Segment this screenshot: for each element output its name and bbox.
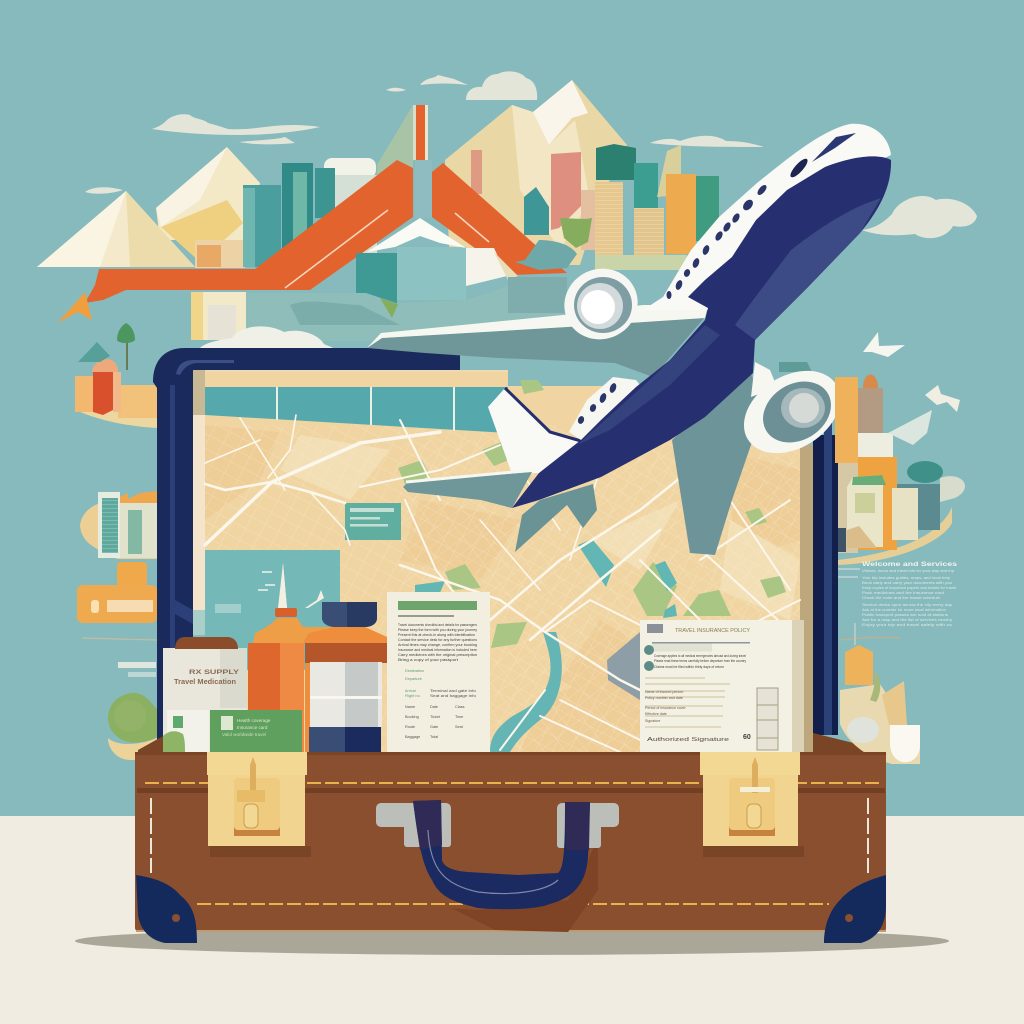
jar: [303, 602, 387, 752]
map green parks: [398, 380, 786, 648]
left corner: [136, 875, 197, 943]
document right: Claims must be filed within thirty days of return: [654, 665, 724, 669]
suitcase lid frame: [153, 348, 838, 752]
document left: Route: [405, 725, 415, 729]
document left: Seat and baggage info: [430, 694, 476, 698]
document left: Seat: [455, 725, 464, 729]
green card: Insurance card: [237, 725, 268, 730]
map sign: [345, 503, 401, 540]
document left: Destination: [405, 669, 424, 673]
document left: Arrival times may change, confirm your booking: [398, 643, 477, 647]
map picture panel: [205, 550, 340, 670]
services body text: Visitors, hours and travel info for your stay and trip: [862, 568, 954, 573]
near engine pylon: [751, 362, 777, 397]
green card: Health coverage: [237, 718, 271, 723]
document right: Effective date: [645, 712, 667, 716]
white medicine box: RX SUPPLY: [189, 670, 239, 676]
document left: Flight no.: [405, 694, 421, 698]
tail plane lower: [515, 484, 597, 552]
right lower vignette: [840, 623, 920, 764]
document left: Ticket: [430, 715, 441, 719]
left clasp: [207, 752, 311, 857]
map: [205, 372, 800, 752]
left town vignette top: [75, 323, 157, 428]
services body text: Enjoy your trip and travel safely with us: [862, 622, 952, 627]
handle shadow: [451, 838, 598, 932]
document left: Time: [455, 715, 463, 719]
right corner: [824, 875, 886, 943]
orange arrow: [57, 105, 567, 323]
teal towers: [243, 105, 413, 267]
document left: Booking: [405, 715, 419, 719]
document left: Gate: [430, 725, 438, 729]
bottle, jar and box group: [163, 563, 387, 752]
services body text: Your trip includes guides, maps, and local help: [862, 575, 950, 580]
right handle mount: [557, 803, 619, 848]
document left: Date: [430, 705, 438, 709]
right towers: [560, 144, 719, 270]
front left mountain: [37, 191, 195, 267]
document left: Contact the service desk for any further questions: [398, 638, 477, 642]
skyline collage: [37, 80, 719, 341]
tail plane upper: [403, 472, 532, 508]
near wing: [672, 370, 763, 555]
plane one: [863, 332, 905, 357]
services body text: Check the route and the transit schedule: [862, 595, 940, 600]
center mountains: [445, 80, 627, 265]
suitcase interior ledges: [138, 733, 882, 753]
right clasp: [700, 752, 804, 857]
map shading: [205, 425, 800, 752]
document right: Coverage applies to all medical emergencies abroad and during travel: [654, 654, 746, 658]
left handle mount: [376, 803, 451, 847]
map river: [490, 632, 562, 752]
handle: [413, 800, 590, 909]
central blocks and valley: [191, 218, 578, 341]
airplane: [403, 124, 891, 555]
stitching: [145, 783, 880, 904]
map teal patches: [415, 539, 677, 618]
document left: Present this at check-in along with identification: [398, 633, 475, 637]
left small bits and bush: [82, 638, 160, 760]
document right: Policy number and date: [645, 696, 683, 700]
services body text: Service desks open across the city every day: [862, 602, 952, 607]
document right: Please read these terms carefully before departure from the country: [654, 659, 746, 663]
document left: Class: [455, 705, 465, 709]
white medicine box: Travel Medication: [174, 679, 236, 686]
map water: [205, 387, 508, 433]
services body text: [862, 568, 956, 627]
services body text: Public transport passes are sold at stations: [862, 612, 948, 617]
document right: Signature: [645, 719, 660, 723]
document right: Authorized Signature: [647, 737, 729, 743]
near engine: [729, 354, 855, 470]
small planes: [863, 332, 960, 412]
passenger windows: [577, 183, 768, 425]
left town vignette middle: [77, 491, 157, 623]
orange bottle: [248, 563, 360, 752]
document right: [640, 620, 804, 752]
document left: Bring a copy of your passport: [398, 658, 458, 662]
ground shadow: [75, 927, 949, 955]
document left: Total: [430, 735, 438, 739]
document left: Please keep the form with you during your journey: [398, 628, 477, 632]
document left: Baggage: [405, 735, 420, 739]
green card: [210, 710, 302, 752]
document left: Name: [405, 705, 415, 709]
back left mountain: [156, 147, 260, 268]
tail fin: [488, 388, 581, 474]
document left: Terminal and gate info: [430, 689, 476, 693]
map roads: [205, 415, 800, 752]
cloud on lid: [200, 326, 333, 348]
document left: Carry medicines with the original prescription: [398, 653, 477, 657]
services text block: [838, 561, 958, 627]
services heading: Welcome and Services: [862, 561, 958, 568]
document left: Travel documents checklist and details for passengers: [398, 623, 477, 627]
document left: [387, 592, 490, 752]
right town vignette: [835, 374, 965, 565]
services body text: Ask at the counter for more local information: [862, 607, 946, 612]
services body text: Book early and carry your documents with you: [862, 580, 952, 585]
map grey area: [607, 632, 640, 700]
clouds: [85, 71, 977, 238]
services body text: Ask for a map and the list of services nearby: [862, 617, 952, 622]
white medicine box: [163, 637, 247, 752]
suitcase base: [135, 752, 886, 943]
document right: TRAVEL INSURANCE POLICY: [675, 628, 751, 634]
far wing and engine: [367, 257, 708, 377]
document right: Name of insured person: [645, 690, 683, 694]
document left: Departure: [405, 677, 422, 681]
fuselage highlight: [735, 198, 881, 340]
services body text: Keep copies of important papers and tickets for travel: [862, 585, 956, 590]
lower fuselage white strip: [569, 377, 640, 440]
document right: Period of insurance cover: [645, 706, 687, 710]
fuselage navy: [512, 156, 891, 508]
green card: Valid worldwide travel: [222, 732, 266, 737]
fuselage white: [643, 124, 891, 310]
document left: Arrival: [405, 689, 416, 693]
white mast behind cap: [280, 563, 287, 608]
cockpit windows: [812, 133, 856, 162]
services side lines: [838, 569, 860, 577]
plane two: [925, 385, 960, 412]
document left: Insurance and medical information is included here: [398, 648, 477, 652]
services body text: Pack medicines and the insurance card: [862, 590, 944, 595]
document right: 60: [743, 734, 751, 741]
